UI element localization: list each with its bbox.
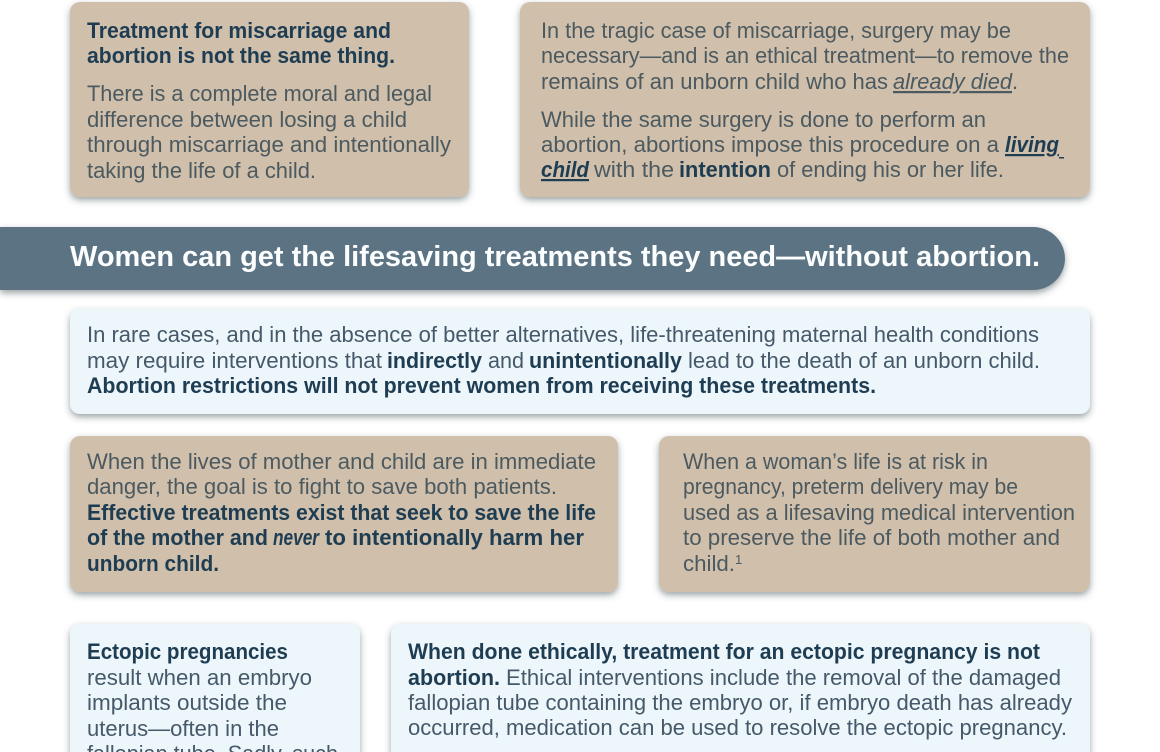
panel: preterm delivery: child. — [683, 551, 735, 576]
text block: surgery in miscarriage: remains of an unborn child who has — [541, 69, 888, 94]
panel: rare cases and indirect interventions: may require interventions that — [87, 348, 382, 373]
panel: ethical ectopic treatment: Ethical interventions include the removal of the damaged — [506, 665, 1061, 690]
panel: preterm delivery: When a woman’s life is at risk in — [683, 449, 988, 474]
text block: moral and legal difference: taking the life of a child. — [87, 158, 316, 183]
panel: ethical ectopic treatment: When done ethically, treatment for an ectopic pregnancy is not — [408, 639, 1041, 664]
panel: preterm delivery: 1 — [735, 552, 742, 567]
text block: surgery in abortion: abortion, abortions impose this procedure on a — [541, 132, 1000, 157]
panel: rare cases and indirect interventions: lead to the death of an unborn child. — [688, 348, 1040, 373]
text block: surgery in abortion — [541, 107, 1064, 182]
text block: surgery in miscarriage: necessary—and is an ethical treatment—to remove the — [541, 43, 1069, 68]
panel: ectopic pregnancies: Ectopic pregnancies — [87, 639, 288, 664]
text block: surgery in abortion: intention — [679, 157, 771, 182]
text block: surgery in miscarriage: In the tragic case of miscarriage, surgery may be — [541, 18, 1011, 43]
panel: saving both patients: Effective treatments exist that seek to save the life — [87, 500, 596, 525]
text block: moral and legal difference: There is a complete moral and legal — [87, 81, 432, 106]
panel: preterm delivery: used as a lifesaving medical intervention — [683, 500, 1075, 525]
panel: ectopic pregnancies: uterus—often in the — [87, 716, 279, 741]
panel: ectopic pregnancies — [70, 624, 360, 752]
text block: moral and legal difference: difference between losing a child — [87, 107, 407, 132]
panel: rare cases and indirect interventions: Abortion restrictions will not prevent women from receiving these treatments. — [87, 373, 876, 398]
text block: surgery in miscarriage — [541, 18, 1069, 94]
text block: surgery in miscarriage: already died — [893, 69, 1013, 94]
panel: ectopic pregnancies: implants outside the — [87, 690, 287, 715]
panel: preterm delivery: pregnancy, preterm delivery may be — [683, 474, 1018, 499]
panel: saving both patients — [70, 436, 618, 592]
panel: saving both patients: to intentionally harm her — [325, 525, 584, 550]
panel: saving both patients: never — [273, 525, 320, 550]
panel: rare cases and indirect interventions: In rare cases, and in the absence of better alternatives, life-threatening maternal health conditions — [87, 322, 1039, 347]
panel: ethical ectopic treatment: occurred, medication can be used to resolve the ectopic pregnancy. — [408, 715, 1067, 740]
heading: not the same thing: abortion is not the same thing. — [87, 43, 395, 68]
panel: preterm delivery: to preserve the life of both mother and — [683, 525, 1060, 550]
banner: lifesaving treatments heading: Women can get the lifesaving treatments they need—without abortion. — [70, 241, 1040, 273]
text block: surgery in abortion: with the — [593, 157, 674, 182]
panel: rare cases and indirect interventions: unintentionally — [529, 348, 683, 373]
panel: rare cases and indirect interventions: and — [488, 348, 524, 373]
panel: preterm delivery — [659, 436, 1090, 592]
heading: not the same thing: Treatment for miscarriage and — [87, 18, 391, 43]
panel: ethical ectopic treatment: fallopian tube containing the embryo or, if embryo death has already — [408, 690, 1072, 715]
panel: saving both patients: When the lives of mother and child are in immediate — [87, 449, 596, 474]
panel: ethical ectopic treatment — [391, 624, 1090, 752]
panel: saving both patients: unborn child. — [87, 551, 219, 576]
text block: surgery in miscarriage: . — [1012, 69, 1018, 94]
heading: not the same thing — [87, 18, 395, 68]
panel: ectopic pregnancies: result when an embryo — [87, 665, 312, 690]
panel: rare cases and indirect interventions: indirectly — [387, 348, 483, 373]
text block: surgery in abortion: While the same surgery is done to perform an — [541, 107, 986, 132]
text block: surgery in abortion: living — [1005, 132, 1060, 157]
text block: surgery in abortion: of ending his or her life. — [777, 157, 1004, 182]
panel: surgery after miscarriage vs abortion — [520, 2, 1090, 197]
text block: surgery in abortion: child — [541, 157, 590, 182]
panel: rare cases and indirect interventions — [70, 309, 1090, 414]
banner: lifesaving treatments heading — [0, 227, 1065, 290]
panel: treatment for miscarriage vs abortion — [70, 2, 469, 197]
panel: ethical ectopic treatment: abortion. — [408, 665, 500, 690]
panel: saving both patients: danger, the goal is to fight to save both patients. — [87, 474, 557, 499]
text block: moral and legal difference — [87, 81, 451, 183]
text block: moral and legal difference: through miscarriage and intentionally — [87, 132, 451, 157]
panel: saving both patients: of the mother and — [87, 525, 268, 550]
